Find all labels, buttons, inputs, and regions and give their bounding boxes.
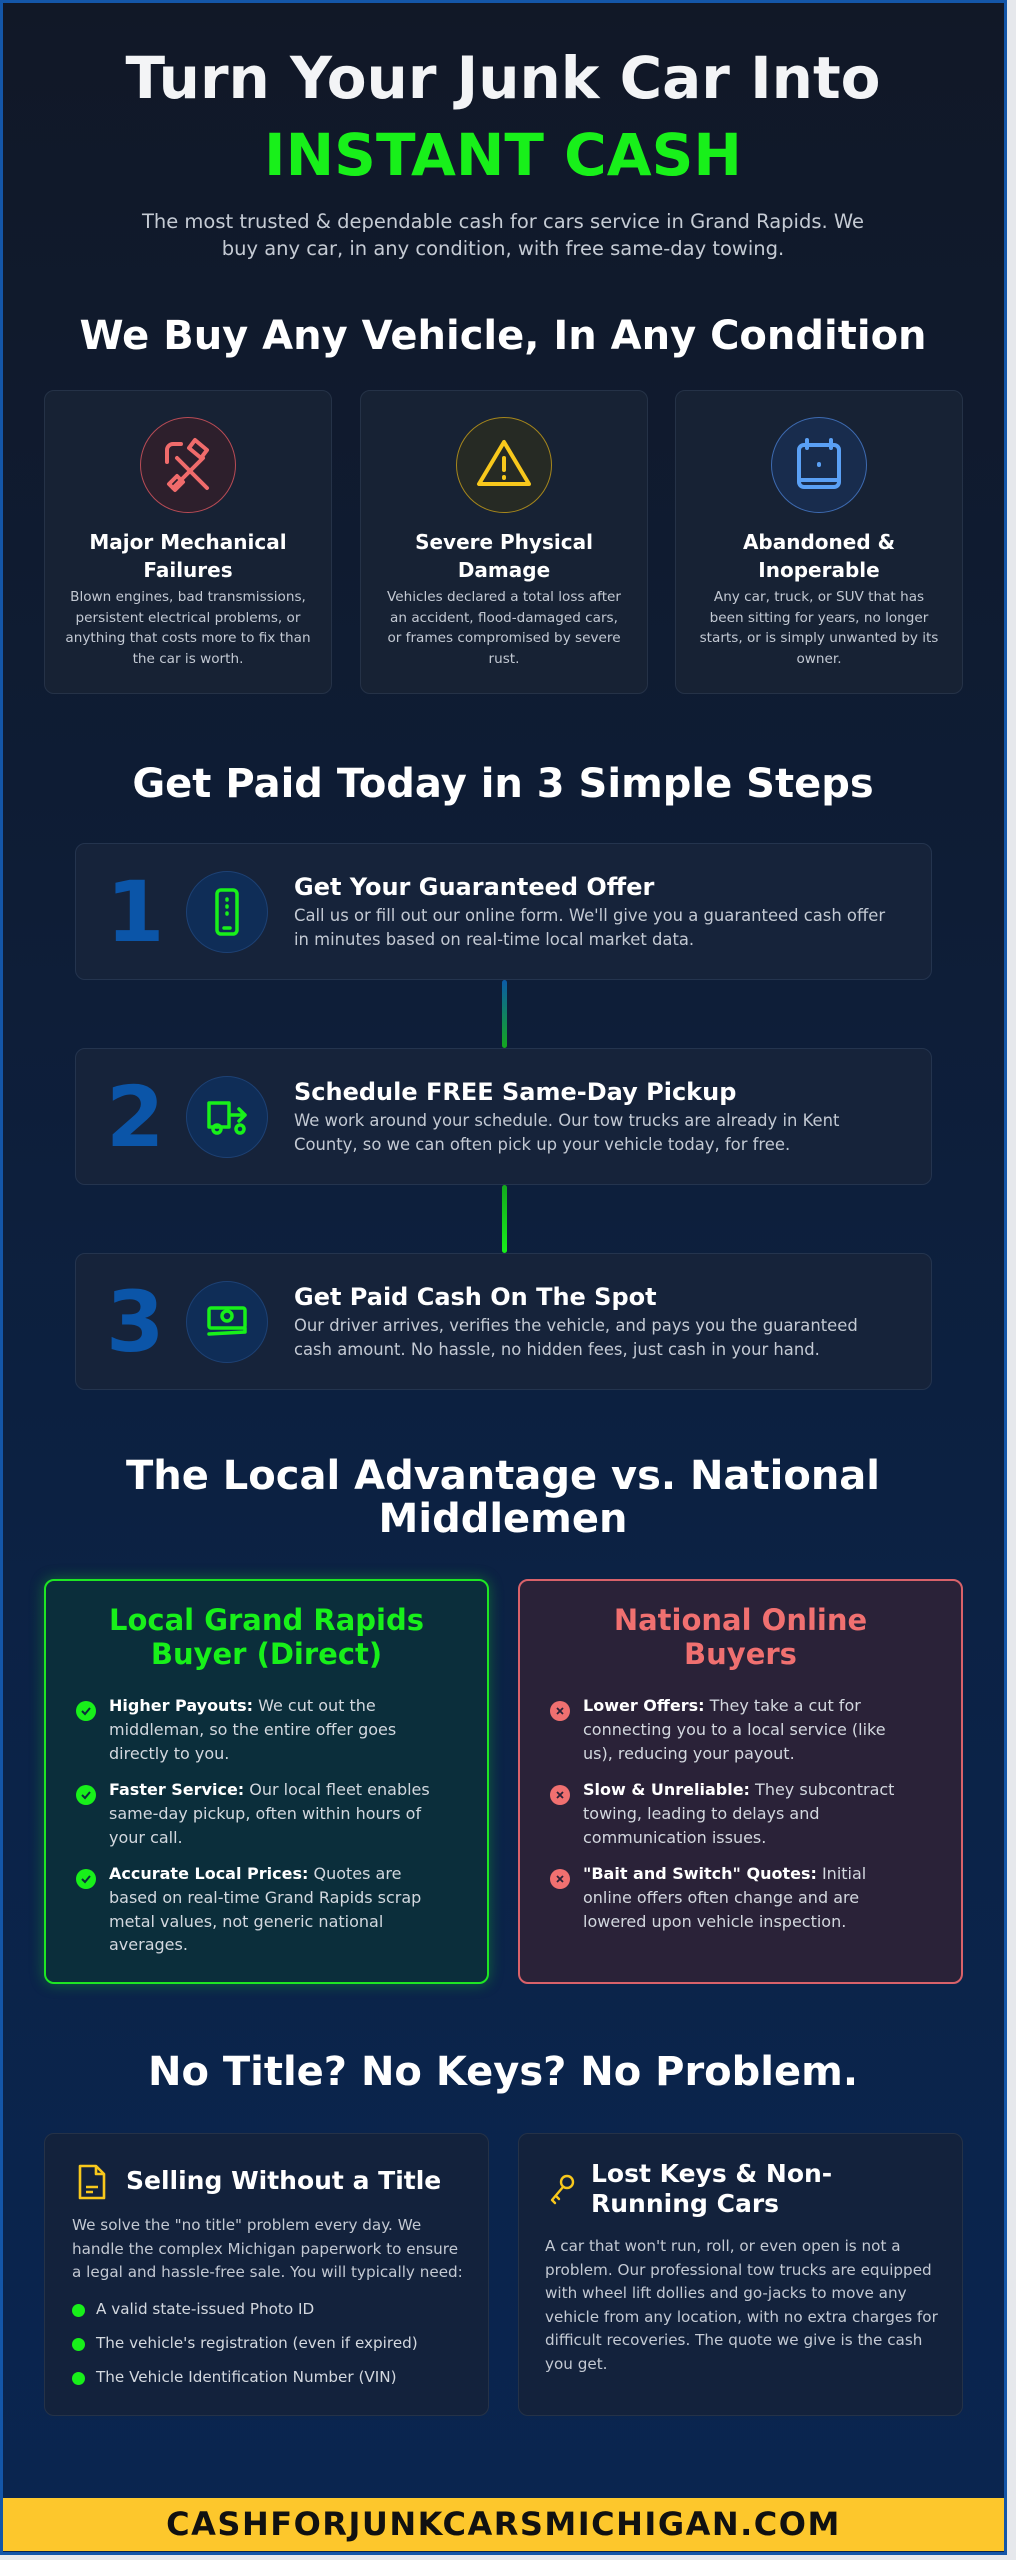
- heading: steps: Get Paid Today in 3 Simple Steps: [132, 761, 874, 807]
- subtitle: The most trusted & dependable cash for cars service in Grand Rapids. We buy any car, in any condition, with free same-day towing.: [142, 210, 864, 260]
- step 2: [75, 1048, 932, 1185]
- panel title: National Online: [614, 1603, 867, 1637]
- panel title: [109, 1603, 424, 1671]
- panel title: Lost Keys & Non-: [591, 2159, 832, 2188]
- card title: Abandoned &: [743, 530, 895, 554]
- title: [125, 44, 881, 189]
- list: local benefits: Higher Payouts: We cut out the middleman, so the entire offer goes directly to you.: [109, 1696, 396, 1763]
- card title: Failures: [143, 558, 233, 582]
- list: local benefits: Faster Service: Our local fleet enables same-day pickup, often within hours of your call.: [109, 1780, 430, 1847]
- panel: selling without title: [44, 2133, 489, 2416]
- panel title: [614, 1603, 867, 1671]
- icon: tools: [140, 417, 236, 513]
- step 1: Call us or fill out our online form. We'll give you a guaranteed cash offer in minutes based on real-time local market data.: [294, 906, 885, 949]
- list: requirements: The vehicle's registration (even if expired): [96, 2334, 418, 2352]
- panel title: Buyers: [684, 1637, 797, 1671]
- heading: we buy any vehicle: We Buy Any Vehicle, In Any Condition: [79, 313, 927, 359]
- card text: Vehicles declared a total loss after an accident, flood-damaged cars, or frames compromised by severe rust.: [387, 589, 621, 666]
- panel title: Running Cars: [591, 2189, 779, 2218]
- panel text: We solve the "no title" problem every day. We handle the complex Michigan paperwork to ensure a legal and hassle-free sale. You will typically need:: [72, 2216, 463, 2281]
- footer banner: CASHFORJUNKCARSMICHIGAN.COM: [166, 2505, 841, 2543]
- panel title: Buyer (Direct): [151, 1637, 382, 1671]
- card title: Damage: [458, 558, 550, 582]
- connector arrow 1: [502, 980, 507, 1048]
- panel: physical damage: [360, 390, 648, 694]
- icon: tow truck: [186, 1076, 268, 1158]
- list: local benefits: Accurate Local Prices: Quotes are based on real-time Grand Rapids scrap metal values, not generic national averages.: [109, 1864, 421, 1954]
- card text: Any car, truck, or SUV that has been sitting for years, no longer starts, or is simply unwanted by its owner.: [700, 589, 938, 666]
- heading: local advantage: [126, 1453, 880, 1542]
- card title: Inoperable: [758, 558, 880, 582]
- footer banner: [3, 2498, 1004, 2551]
- icon: cash: [186, 1281, 268, 1363]
- step 2: We work around your schedule. Our tow trucks are already in Kent County, so we can often pick up your vehicle today, for free.: [294, 1111, 839, 1154]
- step 3: Get Paid Cash On The Spot: [294, 1283, 657, 1311]
- step 1: Get Your Guaranteed Offer: [294, 873, 654, 901]
- list: requirements: A valid state-issued Photo ID: [96, 2300, 314, 2318]
- card title: [743, 530, 895, 582]
- panel title: Selling Without a Title: [126, 2166, 441, 2195]
- connector arrow 2: [502, 1185, 507, 1253]
- panel: national buyers: [518, 1579, 963, 1984]
- card title: Major Mechanical: [89, 530, 287, 554]
- icon: phone: [186, 871, 268, 953]
- list: requirements: The Vehicle Identification Number (VIN): [96, 2368, 397, 2386]
- panel text: A car that won't run, roll, or even open is not a problem. Our professional tow trucks are equipped with wheel lift dollies and go-jacks to move any vehicle from any location, with no extra charges for difficult recoveries. The quote we give is the cash you get.: [545, 2237, 938, 2372]
- list: national drawbacks: "Bait and Switch" Quotes: Initial online offers often change and are lowered upon vehicle inspection.: [583, 1864, 866, 1931]
- card title: Severe Physical: [415, 530, 593, 554]
- panel title: Local Grand Rapids: [109, 1603, 424, 1637]
- step 1: 1: [106, 863, 164, 961]
- icon: document: [78, 2164, 106, 2200]
- list: national drawbacks: Lower Offers: They take a cut for connecting you to a local service (like us), reducing your payout.: [583, 1696, 886, 1763]
- panel: mechanical failures: [44, 390, 332, 694]
- title: Turn Your Junk Car Into: [125, 44, 881, 112]
- heading: local advantage: Middlemen: [379, 1496, 627, 1542]
- step 2: Schedule FREE Same-Day Pickup: [294, 1078, 736, 1106]
- panel title: [591, 2159, 832, 2218]
- card text: Blown engines, bad transmissions, persistent electrical problems, or anything that costs more to fix than the car is worth.: [65, 589, 311, 666]
- heading: local advantage: The Local Advantage vs. National: [126, 1453, 880, 1499]
- icon: calendar: [771, 417, 867, 513]
- panel: local buyer: [44, 1579, 489, 1984]
- step 2: 2: [106, 1068, 164, 1166]
- list: local benefits: [76, 1696, 430, 1954]
- step 3: Our driver arrives, verifies the vehicle, and pays you the guaranteed cash amount. No hassle, no hidden fees, just cash in your hand.: [294, 1316, 858, 1359]
- icon: warning: [456, 417, 552, 513]
- list: national drawbacks: [550, 1696, 894, 1931]
- card title: [415, 530, 593, 582]
- panel: lost keys: [518, 2133, 963, 2416]
- list: national drawbacks: Slow & Unreliable: They subcontract towing, leading to delays and communication issues.: [583, 1780, 894, 1847]
- heading: no title: No Title? No Keys? No Problem.: [148, 2049, 858, 2095]
- step 1: [75, 843, 932, 980]
- step 3: [75, 1253, 932, 1390]
- card title: [89, 530, 287, 582]
- list: requirements: [72, 2300, 418, 2386]
- step 3: 3: [106, 1273, 164, 1371]
- icon: key: [550, 2174, 574, 2204]
- panel: abandoned: [675, 390, 963, 694]
- title: INSTANT CASH: [264, 121, 742, 189]
